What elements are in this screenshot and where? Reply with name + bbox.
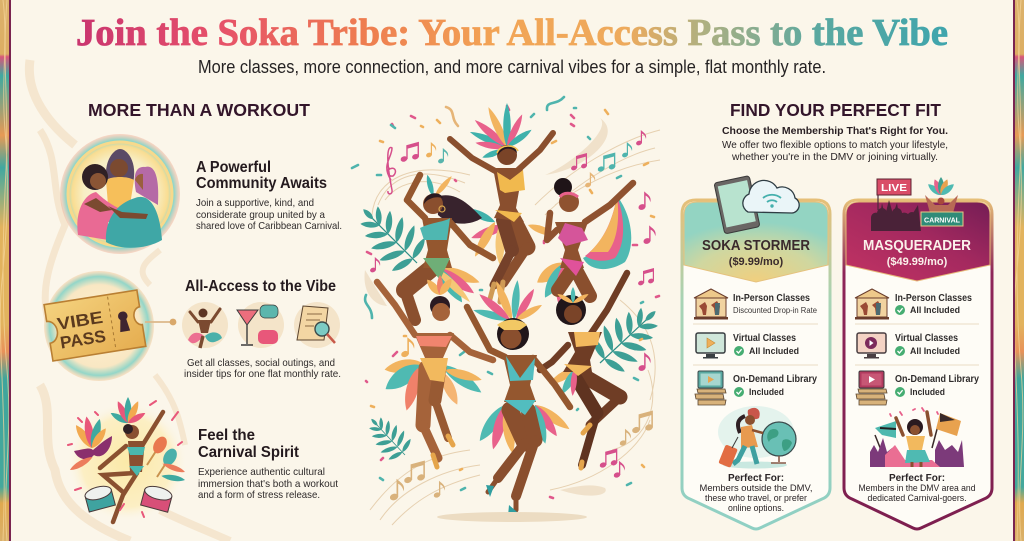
row: virtual classes: Virtual Classes xyxy=(895,333,958,344)
icon: vibe pass ticket: VIBE xyxy=(56,308,104,334)
plan name and price xyxy=(863,238,971,268)
row: on-demand library: Included xyxy=(910,387,945,398)
row: virtual classes xyxy=(857,333,960,358)
dancer: lower right xyxy=(540,273,627,468)
row: on-demand library xyxy=(695,371,817,405)
perfect for text: Members in the DMV area and xyxy=(858,482,976,493)
text: all-access to the vibe: Get all classes, social outings, and xyxy=(187,358,335,369)
text: feel the carnival spirit: Experience authentic cultural xyxy=(198,467,325,478)
plan name and price xyxy=(702,238,810,268)
dancer: left xyxy=(405,174,493,320)
icon: celebrating crowd with flags xyxy=(870,408,964,467)
music notes xyxy=(369,130,656,501)
text: a powerful community awaits: Join a supportive, kind, and xyxy=(196,198,314,209)
text: a powerful community awaits: shared love of Caribbean Carnival. xyxy=(196,221,342,232)
icon: tablet and wifi cloud xyxy=(714,176,799,234)
icon: live crowd and carnival float: CARNIVAL xyxy=(924,216,960,224)
confetti xyxy=(352,97,659,498)
row: on-demand library: Included xyxy=(749,387,784,398)
text: a powerful community awaits: considerate group united by a xyxy=(196,210,325,221)
plan name and price: ($49.99/mo) xyxy=(887,256,948,268)
dancer: right with sash xyxy=(533,178,633,303)
card: soka stormer xyxy=(682,176,830,529)
plan name and price: SOKA STORMER xyxy=(702,238,810,254)
dancer: bottom left xyxy=(377,275,493,467)
card shape xyxy=(682,200,830,529)
row: virtual classes: All Included xyxy=(910,346,960,357)
card shape xyxy=(844,200,992,529)
intro text: Choose the Membership That's Right for You. xyxy=(722,126,948,137)
icon: community embrace xyxy=(60,134,180,254)
card: masquerader xyxy=(844,177,992,529)
perfect for text: these who travel, or prefer xyxy=(705,492,807,503)
row: on-demand library: On-Demand Library xyxy=(895,374,979,385)
icon: dancer xyxy=(182,302,228,348)
perfect for text: Members outside the DMV, xyxy=(700,482,812,493)
palm leaves xyxy=(345,191,673,467)
dancer: top centre xyxy=(450,103,557,302)
text: a powerful community awaits: Community Awaits xyxy=(196,175,327,192)
perfect for text: online options. xyxy=(728,502,784,513)
row: in-person classes: All Included xyxy=(910,305,960,316)
floor shadow xyxy=(437,512,587,522)
icon: vibe pass ticket xyxy=(44,271,154,381)
perfect for text xyxy=(700,473,812,513)
intro text: We offer two flexible options to match your lifestyle, xyxy=(722,140,948,151)
icon: cocktail and chat bubbles xyxy=(237,302,284,348)
text: all-access to the vibe: All-Access to the Vibe xyxy=(185,278,336,295)
text: all-access to the vibe xyxy=(184,278,341,380)
row: in-person classes: Discounted Drop-in Rate xyxy=(733,305,817,315)
icon: live crowd and carnival float: LIVE xyxy=(881,183,907,194)
dancer: centre front xyxy=(467,280,572,518)
heading: find your perfect fit: FIND YOUR PERFECT FIT xyxy=(730,100,941,120)
icon: live crowd and carnival float xyxy=(871,177,963,231)
icon: scroll and magnifier xyxy=(294,302,340,348)
text: feel the carnival spirit: immersion that's both a workout xyxy=(198,479,338,490)
text: a powerful community awaits: A Powerful xyxy=(196,159,271,176)
panel: find your perfect fit xyxy=(682,100,992,529)
icon: carnival dancer with mask and drums xyxy=(67,397,187,522)
music staff swooshes xyxy=(364,118,660,525)
row: on-demand library: On-Demand Library xyxy=(733,374,817,385)
illustration: carnival dancers xyxy=(345,97,673,525)
row: virtual classes: All Included xyxy=(749,346,799,357)
icon: vibe pass ticket: PASS xyxy=(59,327,107,353)
perfect for text: dedicated Carnival-goers. xyxy=(868,492,966,503)
intro text: whether you're in the DMV or joining virtually. xyxy=(731,152,938,163)
heading: more than a workout: MORE THAN A WORKOUT xyxy=(88,100,310,120)
plan name and price: MASQUERADER xyxy=(863,238,971,254)
text: feel the carnival spirit xyxy=(198,427,338,501)
row: virtual classes: Virtual Classes xyxy=(733,333,796,344)
row: in-person classes: In-Person Classes xyxy=(895,293,972,304)
row: in-person classes: In-Person Classes xyxy=(733,293,810,304)
left decorative border xyxy=(0,0,11,541)
right decorative border xyxy=(1013,0,1024,541)
intro text xyxy=(722,126,948,163)
row: on-demand library xyxy=(856,371,979,405)
text: a powerful community awaits xyxy=(196,159,342,232)
icon: traveler with globe xyxy=(718,406,796,468)
row: in-person classes xyxy=(855,289,972,320)
text: feel the carnival spirit: Carnival Spirit xyxy=(198,444,299,461)
connector line xyxy=(145,319,176,325)
perfect for text: Perfect For: xyxy=(728,473,784,484)
text: feel the carnival spirit: and a form of stress release. xyxy=(198,490,320,501)
plan name and price: ($9.99/mo) xyxy=(729,256,784,268)
row: virtual classes xyxy=(696,333,799,358)
panel: more than a workout xyxy=(44,100,342,522)
background flowing swirls xyxy=(29,60,230,541)
subtitle: More classes, more connection, and more carnival vibes for a simple, flat monthly rate. xyxy=(198,56,826,77)
perfect for text: Perfect For: xyxy=(889,473,945,484)
row: in-person classes xyxy=(694,289,817,320)
perfect for text xyxy=(858,473,976,503)
text: all-access to the vibe: insider tips for one flat monthly rate. xyxy=(184,369,341,380)
text: feel the carnival spirit: Feel the xyxy=(198,427,255,444)
title: Join the Soka Tribe: Your All-Access Pass to the Vibe xyxy=(76,12,948,54)
